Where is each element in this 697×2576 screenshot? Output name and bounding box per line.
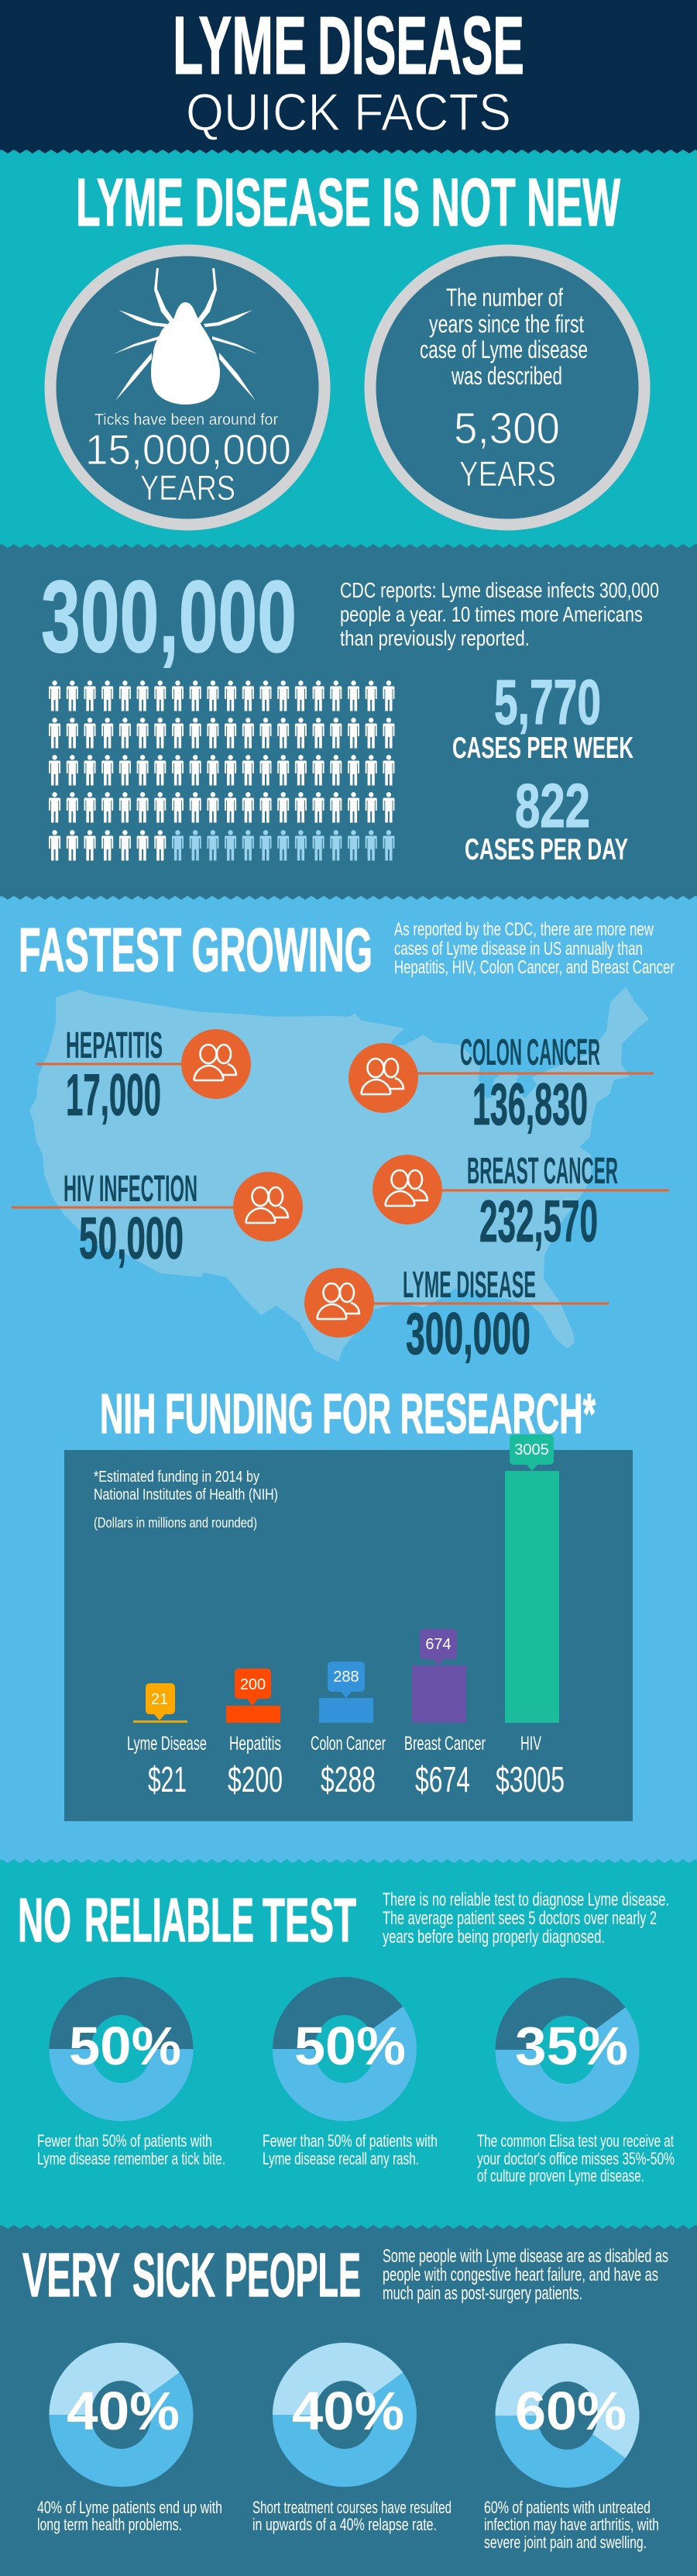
stat: cases per week xyxy=(452,667,633,765)
donut: 50% tick bite: 50% xyxy=(69,2016,181,2076)
donut: 50% rash xyxy=(273,1977,417,2121)
map: United States xyxy=(29,987,649,1362)
text: number of years: was described xyxy=(451,362,562,390)
bar: breast cancer: 674 xyxy=(425,1636,452,1653)
axis labels: Colon Cancer xyxy=(311,1733,386,1755)
heading: no reliable test: TEST xyxy=(263,1886,356,1954)
title: Lyme Disease: DISEASE xyxy=(318,0,524,91)
caption: relapse rate: in upwards of a 40% relapse rate. xyxy=(252,2515,437,2534)
stat: cases per day xyxy=(465,771,628,866)
dollar values: $21 xyxy=(148,1759,187,1799)
callout: HIV infection xyxy=(12,1169,303,1272)
stat: cases per week: 5,770 xyxy=(494,667,601,738)
icon: tick xyxy=(113,268,258,405)
note: estimated funding xyxy=(94,1469,278,1531)
bar: HIV xyxy=(505,1434,559,1723)
panel: very sick people xyxy=(0,2225,697,2576)
title: Lyme Disease xyxy=(173,0,524,91)
panel: Lyme disease is not new xyxy=(0,150,697,549)
dollar values: $674 xyxy=(415,1759,470,1799)
callout: breast cancer xyxy=(373,1151,669,1255)
dollar values xyxy=(148,1759,565,1799)
text: number of years: The number of xyxy=(446,284,563,312)
panel: 300,000 cases xyxy=(0,544,697,900)
axis labels: Hepatitis xyxy=(229,1733,281,1755)
donut: 50% tick bite xyxy=(50,1977,194,2121)
circle: ticks xyxy=(50,250,324,525)
callout: Lyme disease: LYME DISEASE xyxy=(403,1265,536,1306)
donut: 40% relapse: 40% xyxy=(292,2381,404,2441)
caption: relapse rate xyxy=(252,2498,452,2534)
caption: tick bite: Lyme disease remember a tick bite. xyxy=(37,2149,225,2168)
heading: very sick people: VERY xyxy=(22,2240,120,2309)
callout: breast cancer: 232,570 xyxy=(479,1189,598,1255)
donut: 40% long term xyxy=(50,2343,194,2487)
caption: tick bite: Fewer than 50% of patients with xyxy=(37,2131,212,2151)
bar chart: NIH funding xyxy=(64,1434,633,1821)
donut: 40% long term: 40% xyxy=(67,2381,180,2441)
header panel xyxy=(0,0,697,153)
text: number of years: years since the first xyxy=(429,310,584,338)
caption: tick bite xyxy=(37,2131,225,2168)
heading: no reliable test: RELIABLE xyxy=(84,1886,254,1954)
heading: very sick people xyxy=(22,2240,361,2309)
bar: colon cancer xyxy=(319,1662,373,1723)
text: as reported by the CDC xyxy=(394,919,675,978)
caption: relapse rate: Short treatment courses have resulted xyxy=(252,2498,452,2517)
number: 5,300: 5,300 xyxy=(454,404,560,453)
callout: Lyme disease: 300,000 xyxy=(406,1301,530,1367)
panel: fastest growing and funding xyxy=(0,896,697,1863)
bar: breast cancer xyxy=(412,1629,466,1723)
caption: rash xyxy=(263,2131,438,2168)
caption: long term problems: long term health problems. xyxy=(37,2515,182,2534)
text: no reliable test intro xyxy=(383,1889,669,1947)
bar: Lyme disease: 21 xyxy=(151,1691,168,1708)
note: estimated funding: *Estimated funding in 2014 by xyxy=(94,1469,259,1486)
pictogram: people grid xyxy=(49,680,394,860)
donut: 40% relapse xyxy=(273,2343,417,2487)
big number: 300,000: 300,000 xyxy=(41,560,297,673)
panel: no reliable test xyxy=(0,1859,697,2229)
donut: 35% Elisa xyxy=(496,1978,640,2122)
text: CDC reports xyxy=(340,578,659,650)
donut: 60% arthritis xyxy=(496,2344,640,2488)
bar: HIV: 3005 xyxy=(514,1441,549,1458)
callout: hepatitis: 17,000 xyxy=(66,1062,161,1128)
bar: colon cancer: 288 xyxy=(333,1669,359,1686)
bar: hepatitis xyxy=(226,1669,280,1723)
bar: Lyme disease xyxy=(133,1683,187,1723)
heading: very sick people: SICK xyxy=(132,2240,215,2309)
text: very sick people intro: much pain as post-surgery patients. xyxy=(383,2283,582,2304)
title: Lyme Disease: LYME xyxy=(173,0,307,91)
donut: 35% Elisa: 35% xyxy=(515,2016,628,2076)
text: years: YEARS xyxy=(459,454,556,494)
note: estimated funding: National Institutes of Health (NIH) xyxy=(94,1486,278,1503)
number: 15,000,000: 15,000,000 xyxy=(85,425,291,474)
caption: arthritis xyxy=(484,2498,659,2552)
dollar values: $3005 xyxy=(496,1759,565,1799)
caption: Elisa test xyxy=(477,2131,675,2185)
dollar values: $200 xyxy=(228,1759,283,1799)
callout: Lyme disease xyxy=(304,1265,609,1367)
dollar values: $288 xyxy=(321,1759,376,1799)
donut: 50% rash: 50% xyxy=(294,2016,406,2076)
note: estimated funding: (Dollars in millions and rounded) xyxy=(94,1515,257,1531)
axis labels: Breast Cancer xyxy=(404,1733,486,1755)
callout: hepatitis: HEPATITIS xyxy=(66,1025,163,1066)
text: ticks have been around for: Ticks have been around for xyxy=(94,412,278,429)
axis labels: HIV xyxy=(520,1733,541,1755)
donut: 60% arthritis: 60% xyxy=(515,2381,627,2441)
caption: long term problems: 40% of Lyme patients end up with xyxy=(37,2498,222,2517)
callout: colon cancer xyxy=(348,1032,654,1138)
text: number of years: case of Lyme disease xyxy=(420,336,588,363)
caption: long term problems xyxy=(37,2498,222,2534)
bar: hepatitis: 200 xyxy=(240,1676,266,1693)
heading: no reliable test: NO xyxy=(18,1886,71,1954)
circle: years since first case xyxy=(370,250,644,525)
callout: colon cancer: 136,830 xyxy=(472,1072,588,1138)
caption: rash: Fewer than 50% of patients with xyxy=(263,2131,438,2151)
axis labels xyxy=(127,1733,541,1755)
stat: cases per day: 822 xyxy=(515,771,590,840)
heading: very sick people: PEOPLE xyxy=(225,2240,361,2309)
callout: HIV infection: 50,000 xyxy=(79,1206,184,1272)
heading: fastest growing: FASTEST GROWING xyxy=(19,915,373,984)
text: number of years xyxy=(420,284,588,390)
axis labels: Lyme Disease xyxy=(127,1733,207,1755)
subtitle: Quick Facts: QUICK FACTS xyxy=(186,83,511,142)
text: years: YEARS xyxy=(140,468,235,508)
text: no reliable test intro: years before being properly diagnosed. xyxy=(383,1927,605,1947)
text: CDC reports: than previously reported. xyxy=(340,626,530,650)
text: very sick people intro xyxy=(383,2246,668,2304)
caption: rash: Lyme disease recall any rash. xyxy=(263,2149,419,2168)
callout: hepatitis xyxy=(36,1025,251,1128)
callout: HIV infection: HIV INFECTION xyxy=(64,1169,197,1210)
